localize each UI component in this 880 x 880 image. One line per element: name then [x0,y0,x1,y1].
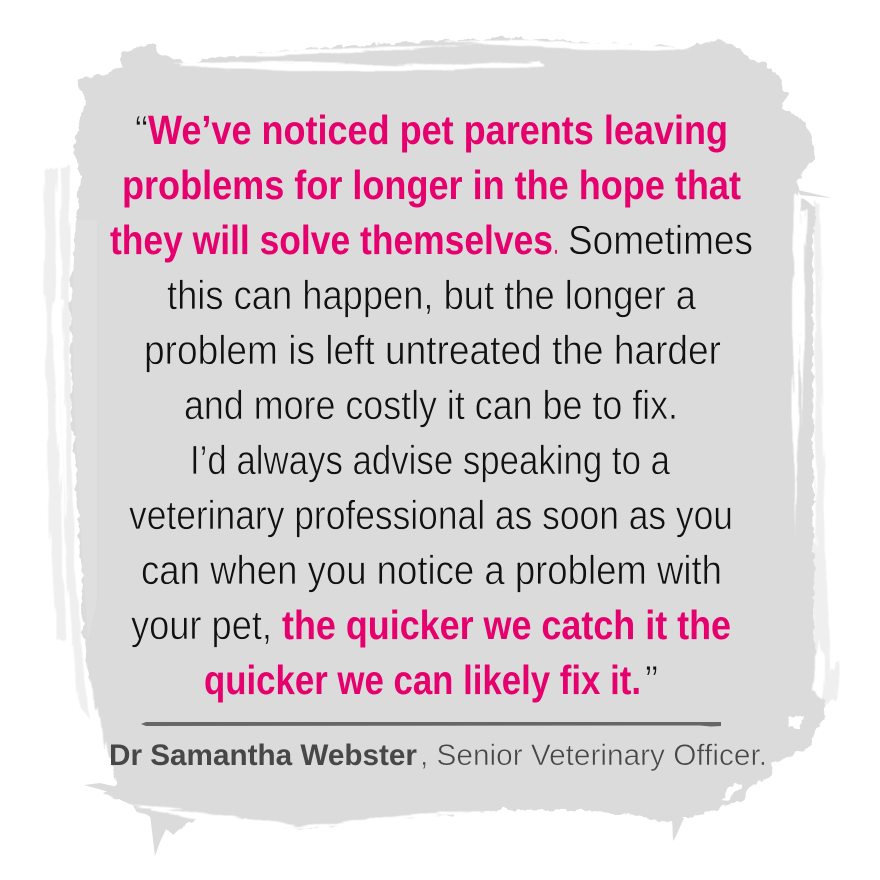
white dry-brush gaps, vertical [58,195,826,770]
white speckles bottom right [722,716,802,802]
pink bold closing statement: the quicker we catch it the [282,602,731,648]
divider line [141,722,721,726]
slightly lighter inner band on the left [72,220,97,640]
quote text [110,107,753,703]
pink bold opening statement [110,107,741,263]
body text: problem is left untreated the harder [144,327,721,373]
pink bold closing statement [204,602,731,703]
attribution name: Dr Samantha Webster [109,739,417,772]
body text: I’d always advise speaking to a [190,437,670,483]
pink bold opening statement: We’ve noticed pet parents leaving [148,107,728,153]
body text: veterinary professional as soon as you [129,492,733,538]
main brush shape [70,38,826,834]
white dry-brush gaps, horizontal [120,41,690,830]
pink bold opening statement: they will solve themselves [110,217,553,263]
closing quotation mark: ” [645,657,658,703]
attribution [109,739,767,772]
attribution role: , Senior Veterinary Officer. [420,739,767,772]
body text: can when you notice a problem with [141,547,722,593]
body text: this can happen, but the longer a [167,272,696,318]
body text: Sometimes [568,217,753,263]
pink bold opening statement: problems for longer in the hope that [122,162,741,208]
pink bold closing statement: quicker we can likely fix it. [204,657,641,703]
thin tapering brush tails [84,190,832,856]
pink full stop: . [553,217,559,263]
opening quotation mark: “ [135,107,148,153]
body text: your pet, [131,602,272,648]
faint left and right brush streaks [44,165,838,720]
body text [129,217,753,648]
body text: and more costly it can be to fix. [184,382,678,428]
